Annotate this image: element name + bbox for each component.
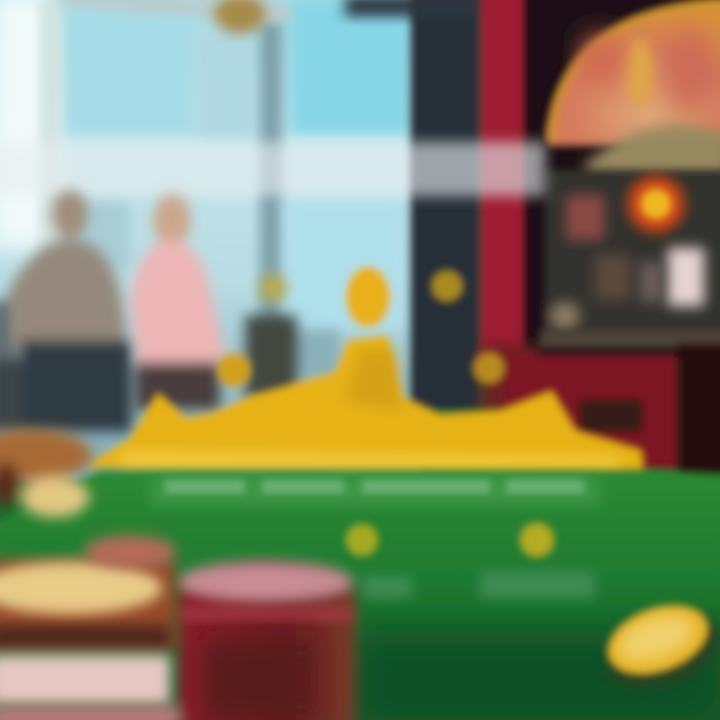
icon: ceiling lamp — [214, 0, 266, 34]
panel: horizontal light band — [0, 142, 545, 196]
icon: small gold coin right — [473, 352, 505, 384]
panel: red curtain column — [480, 0, 720, 415]
icon: large gold coin — [346, 267, 390, 327]
panel: dark pillar — [345, 0, 480, 410]
icon: gold coin bottom right — [599, 593, 720, 700]
panel: arcade machine — [540, 0, 720, 348]
text block: blurred caption one — [362, 576, 412, 598]
text block: blurred caption two — [480, 572, 595, 598]
figure: dark seated shape — [245, 315, 297, 400]
panel: green felt table — [0, 470, 720, 720]
icon: gold coin on pillar — [431, 270, 463, 302]
icon: chips pile left — [0, 429, 92, 517]
panel: red counter — [505, 345, 720, 475]
figure: right person — [130, 194, 226, 410]
icon: small gold coin centre — [217, 353, 251, 387]
chart: gold coin mountain — [88, 335, 644, 472]
panel: window background — [0, 0, 420, 480]
figure: left person — [0, 190, 132, 432]
icon: small gold coin left — [259, 274, 287, 302]
text block: blurred heading row — [165, 480, 584, 493]
icon: table gold dot two — [520, 523, 554, 557]
icon: poker chip stacks — [0, 536, 355, 720]
icon: table gold dot one — [346, 524, 378, 556]
